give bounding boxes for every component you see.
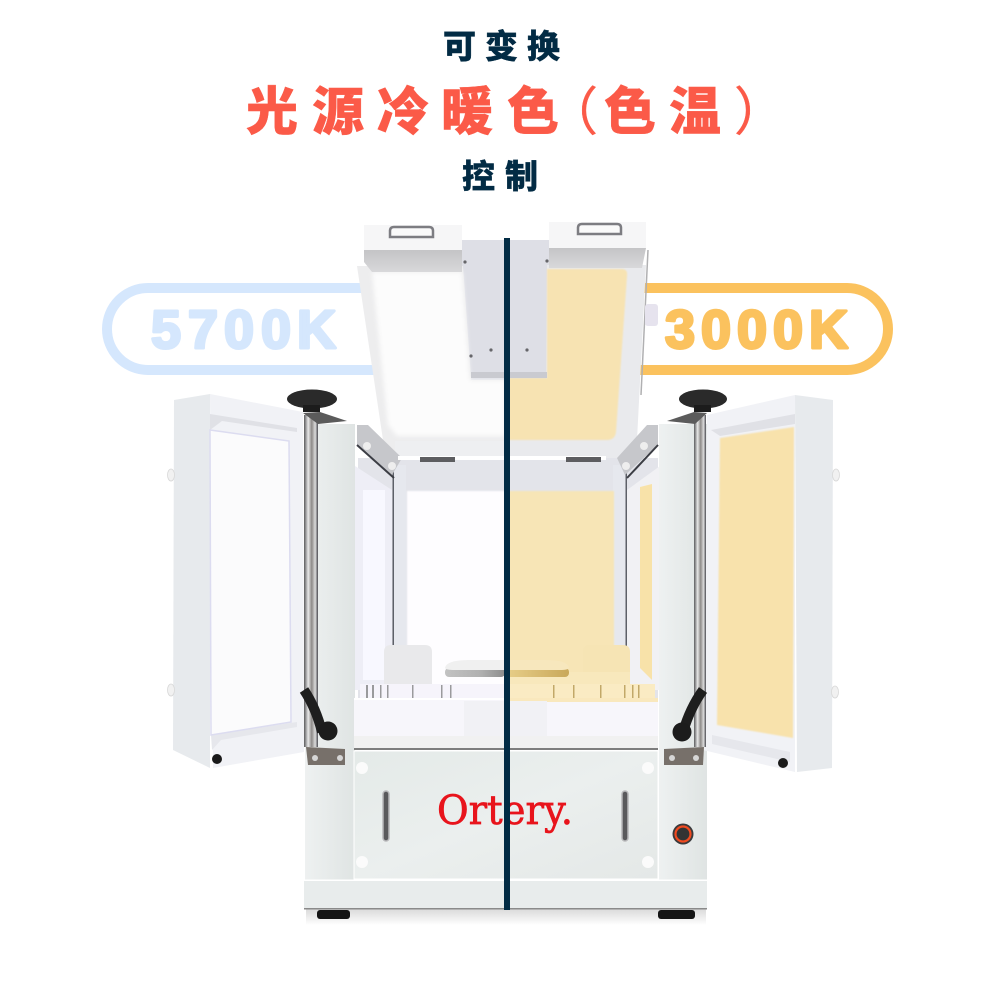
title: top line: 可变换 <box>443 28 560 65</box>
floor shadow <box>306 909 706 925</box>
lid bottom strip <box>395 441 505 457</box>
lid left white panel <box>357 266 505 458</box>
left foot <box>317 910 350 919</box>
left bottom bracket <box>306 747 345 765</box>
lid right amber light panel <box>505 269 627 440</box>
acrylic tray <box>360 684 655 698</box>
chamber back wall <box>358 458 658 703</box>
door side knobs <box>832 469 840 698</box>
door side face <box>173 394 210 768</box>
door front frame <box>210 394 304 768</box>
logo: Ortery. <box>437 788 573 834</box>
lid inner step <box>471 372 547 378</box>
chamber <box>355 425 660 703</box>
base plinth <box>304 880 707 910</box>
back wall white light panel <box>407 491 505 686</box>
bench <box>354 698 658 750</box>
right column <box>659 424 707 880</box>
door latch <box>778 758 788 768</box>
door side face <box>795 395 833 772</box>
left knob <box>287 390 347 424</box>
left diagonal hinge <box>357 425 402 478</box>
label: 5700K: 5700K <box>151 300 336 360</box>
floor amber <box>505 672 630 692</box>
door bottom bevel <box>712 735 790 762</box>
door side knobs <box>168 469 174 696</box>
turntable <box>445 660 569 691</box>
chamber dark vertical edges <box>392 468 627 646</box>
right cable <box>672 690 703 742</box>
panel knobs <box>356 762 654 868</box>
side knob on lid <box>641 250 658 395</box>
right foot <box>658 910 695 919</box>
power button <box>672 824 694 844</box>
right diagonal hinge <box>617 425 658 478</box>
right side wall amber light <box>640 484 652 680</box>
door front frame <box>703 395 795 772</box>
right handle <box>622 791 628 841</box>
centre divider line <box>504 238 510 910</box>
door amber light panel <box>717 427 794 738</box>
title: bottom line: 控制 <box>462 158 538 195</box>
pill: 5700K <box>107 288 375 370</box>
left handle <box>383 791 389 841</box>
lid screws <box>463 259 549 358</box>
right pedestal block <box>583 645 630 685</box>
lid right handle block <box>549 222 646 268</box>
chamber left side wall <box>355 466 392 690</box>
left pole <box>304 415 318 747</box>
door latch <box>212 754 222 764</box>
right door <box>703 395 840 772</box>
lower front panel <box>354 751 658 879</box>
right knob <box>667 390 727 424</box>
door light panel <box>210 430 291 735</box>
title: main heading: 光源冷暖色（色温） <box>246 70 786 145</box>
lid <box>357 222 658 458</box>
door top bevel <box>210 414 297 432</box>
door bottom bevel <box>211 722 297 750</box>
lid back plate <box>461 240 551 380</box>
door top bevel <box>711 414 795 436</box>
bench centre step <box>464 701 547 736</box>
back wall pillars <box>393 465 406 690</box>
right pole <box>694 415 706 747</box>
left cable <box>304 690 338 740</box>
right bottom bracket <box>664 747 704 765</box>
lid right panel frame <box>505 265 646 458</box>
chamber right side wall <box>627 466 660 690</box>
pill: 3000K <box>635 288 888 370</box>
left door <box>168 394 304 768</box>
left pedestal block <box>384 645 432 685</box>
label: 3000K: 3000K <box>665 300 848 360</box>
bench front lip <box>354 736 658 748</box>
back wall amber light panel <box>505 491 614 686</box>
left column <box>305 424 355 880</box>
lid hinges and white gap <box>398 456 606 462</box>
lid left handle block <box>364 225 462 272</box>
